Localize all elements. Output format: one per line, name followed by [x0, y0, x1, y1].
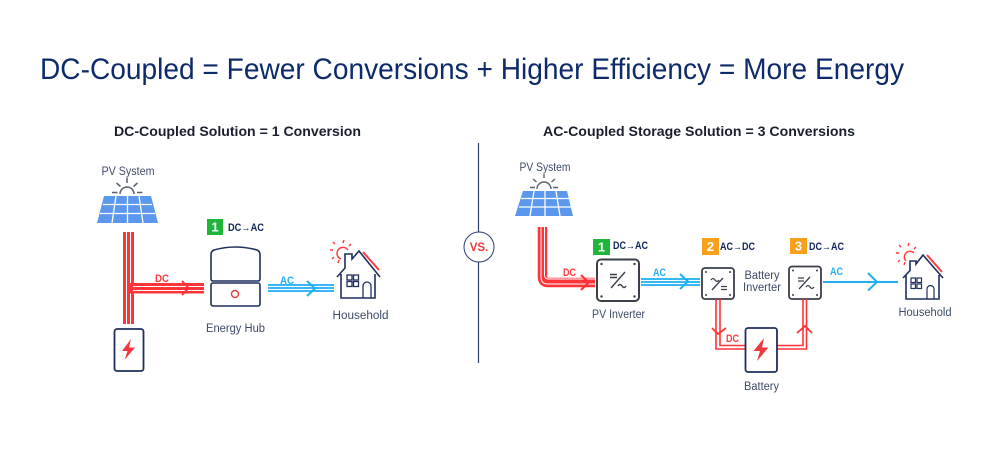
- AC power line left: [268, 284, 334, 292]
- AC power line to battery inverter: [641, 278, 700, 286]
- label: PV Inverter: PV Inverter: [592, 309, 645, 321]
- heading: AC-coupled solution: AC-Coupled Storage Solution = 3 Conversions: [543, 124, 855, 139]
- AC power line to household: [823, 281, 898, 283]
- label: DC right: DC: [563, 267, 576, 279]
- panel: AC-coupled diagram: [515, 162, 952, 393]
- DC power line to battery: [123, 232, 204, 324]
- DC power line via battery: [716, 299, 806, 349]
- badge: step 3: 3: [795, 238, 802, 254]
- divider with VS. badge: [464, 143, 494, 363]
- icon: battery right: [746, 328, 777, 372]
- heading: DC-coupled solution: DC-Coupled Solution = 1 Conversion: [114, 124, 361, 139]
- icon: PV inverter: [597, 260, 639, 301]
- divider with VS. badge: VS.: [470, 242, 488, 254]
- label: Battery Inverter: [743, 270, 781, 294]
- badge: step 2: [702, 238, 719, 255]
- badge: step 1 right: [593, 239, 610, 255]
- label: PV System right: PV System: [520, 162, 570, 174]
- arrow: DC up: [797, 326, 812, 333]
- icon: inverter AC to DC: [702, 268, 734, 299]
- arrow: DC left: [182, 281, 188, 295]
- title: DC-Coupled = Fewer Conversions + Higher Efficiency = More Energy: [40, 53, 904, 86]
- icon: inverter DC to AC: [789, 266, 821, 299]
- badge: step 2: 2: [707, 239, 714, 254]
- icon: household right: [896, 243, 943, 299]
- arrow: AC middle: [680, 274, 688, 289]
- arrow: DC right: [581, 275, 588, 290]
- arrow: DC down: [712, 328, 726, 334]
- badge: step 1 left: [207, 219, 223, 235]
- label: Energy Hub: Energy Hub: [206, 323, 265, 335]
- label: AC right: AC: [830, 266, 843, 278]
- label: Household left: Household: [332, 310, 388, 322]
- label: DC left: DC: [155, 273, 169, 285]
- label: Household right: Household: [898, 307, 952, 319]
- label: Battery Inverter: Battery: [744, 270, 780, 282]
- label: AC middle: AC: [653, 267, 666, 279]
- icon: solar panel left: [97, 178, 158, 223]
- label: DC battery: DC: [726, 333, 739, 345]
- label: DC to AC step 1: DC→AC: [613, 240, 648, 252]
- label: AC to DC step 2: AC→DC: [720, 241, 755, 253]
- badge: step 1 left: 1: [211, 220, 219, 234]
- icon: household left: [330, 240, 380, 298]
- label: Battery Inverter: Inverter: [743, 282, 781, 294]
- arrow: AC left: [307, 281, 315, 296]
- label: DC to AC step 3: DC→AC: [809, 241, 844, 253]
- icon: energy hub: [211, 247, 260, 306]
- icon: solar panel right: [515, 174, 573, 216]
- panel: DC-coupled diagram: [97, 166, 388, 371]
- label: DC to AC left: DC→AC: [228, 222, 264, 234]
- arrow: AC right: [868, 273, 877, 290]
- badge: step 3: [790, 238, 807, 254]
- label: AC left: AC: [280, 275, 294, 287]
- badge: step 1 right: 1: [598, 240, 605, 254]
- label: Battery: Battery: [744, 381, 779, 393]
- DC power line to PV inverter: [541, 227, 595, 284]
- icon: battery left: [114, 329, 144, 371]
- label: PV System left: PV System: [102, 166, 154, 178]
